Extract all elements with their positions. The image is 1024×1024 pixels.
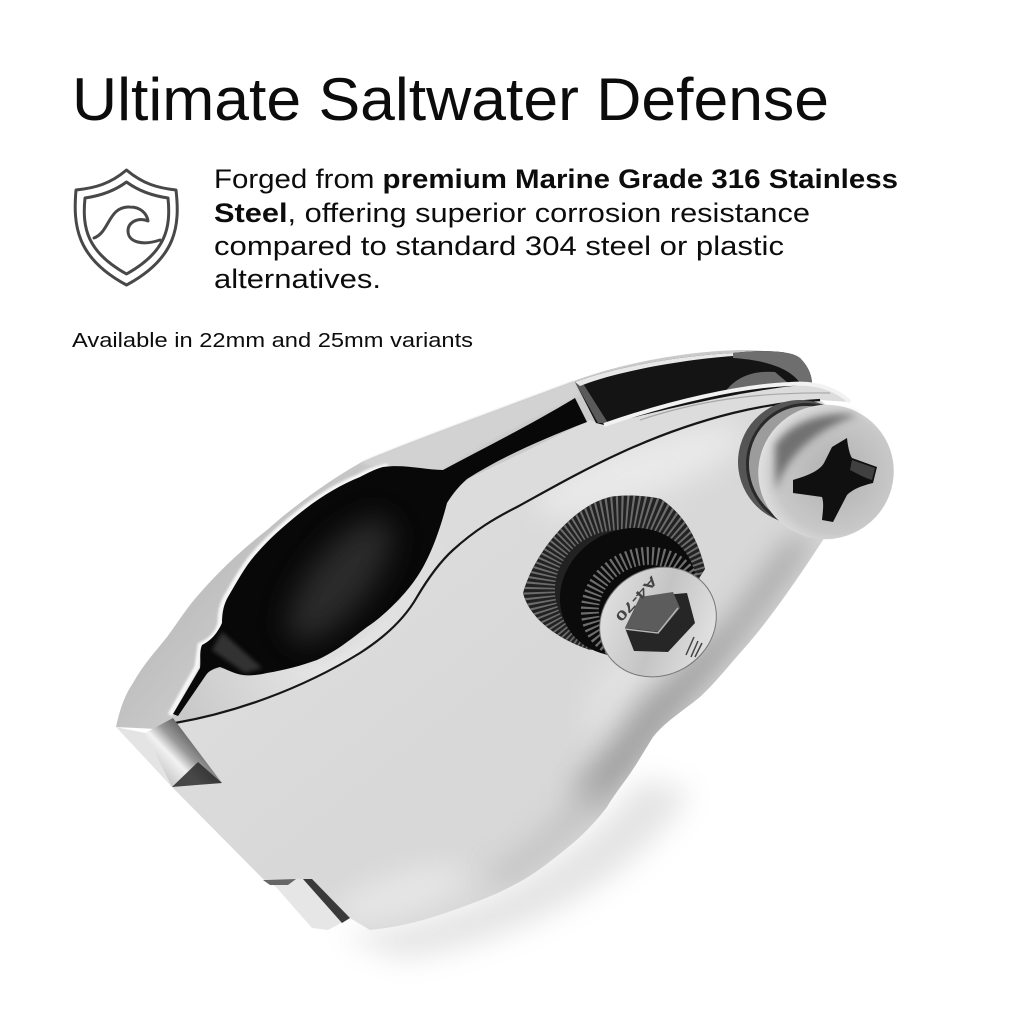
icon: shield with wave <box>75 170 177 285</box>
face sheen top <box>549 424 734 514</box>
notch inner wall <box>575 382 608 423</box>
lower hinge stripe <box>303 879 350 923</box>
upper hinge barrel <box>145 718 222 787</box>
notch top edge <box>575 353 733 386</box>
hinge slot tip <box>172 762 222 787</box>
dark collar <box>536 503 720 681</box>
clamp back plate and wing <box>116 350 813 730</box>
hex socket <box>625 593 695 652</box>
washer ring <box>725 382 891 550</box>
seam line <box>175 400 820 723</box>
head inner shade <box>775 414 858 492</box>
cap marking right <box>686 637 702 657</box>
recess facet <box>850 460 875 480</box>
text block: description: compared to standard 304 steel or plastic <box>214 231 784 261</box>
front face <box>172 400 826 930</box>
lower hinge tip <box>263 879 296 885</box>
text block: description: alternatives. <box>214 264 381 294</box>
washer knurl ticks <box>535 510 705 670</box>
face shade right edge <box>575 535 815 810</box>
face sheen center <box>600 670 645 722</box>
face shade lower <box>495 798 594 885</box>
post behind rim <box>725 372 788 392</box>
knurled shaft <box>572 537 712 671</box>
product: stainless steel clamp <box>100 350 920 960</box>
top notch <box>575 351 812 425</box>
text block: description: Forged from premium Marine Grade 316 Stainless <box>214 164 898 194</box>
text block: description <box>214 164 898 294</box>
text block: description: Steel , offering superior corrosion resistance <box>214 198 810 228</box>
rim groove <box>640 393 830 420</box>
knurled washer <box>523 496 705 650</box>
text: variants note: Available in 22mm and 25mm variants <box>72 330 473 352</box>
notch grainy corner <box>733 351 812 384</box>
screw washer <box>715 377 885 547</box>
lip between bore and seam <box>175 384 850 723</box>
product shadow <box>340 780 690 958</box>
cap marking: A4-70 <box>612 573 661 625</box>
upper wing lighter band <box>360 381 580 470</box>
bore texture <box>270 502 410 658</box>
phillips screw <box>715 377 918 564</box>
title: Ultimate Saltwater Defense <box>72 66 829 133</box>
tube bore <box>173 398 587 716</box>
socket facet <box>625 592 680 632</box>
rim highlight <box>604 384 850 425</box>
socket cap screw <box>523 496 717 678</box>
phillips recess <box>793 438 877 522</box>
screw head <box>734 380 918 564</box>
face highlight lower left <box>348 870 452 920</box>
socket edge <box>625 608 678 633</box>
bore rim highlight <box>170 466 388 715</box>
cap head <box>580 546 736 698</box>
bore lower hint <box>212 632 262 673</box>
upper hinge left piece <box>116 727 172 787</box>
lower hinge barrel <box>263 879 350 930</box>
